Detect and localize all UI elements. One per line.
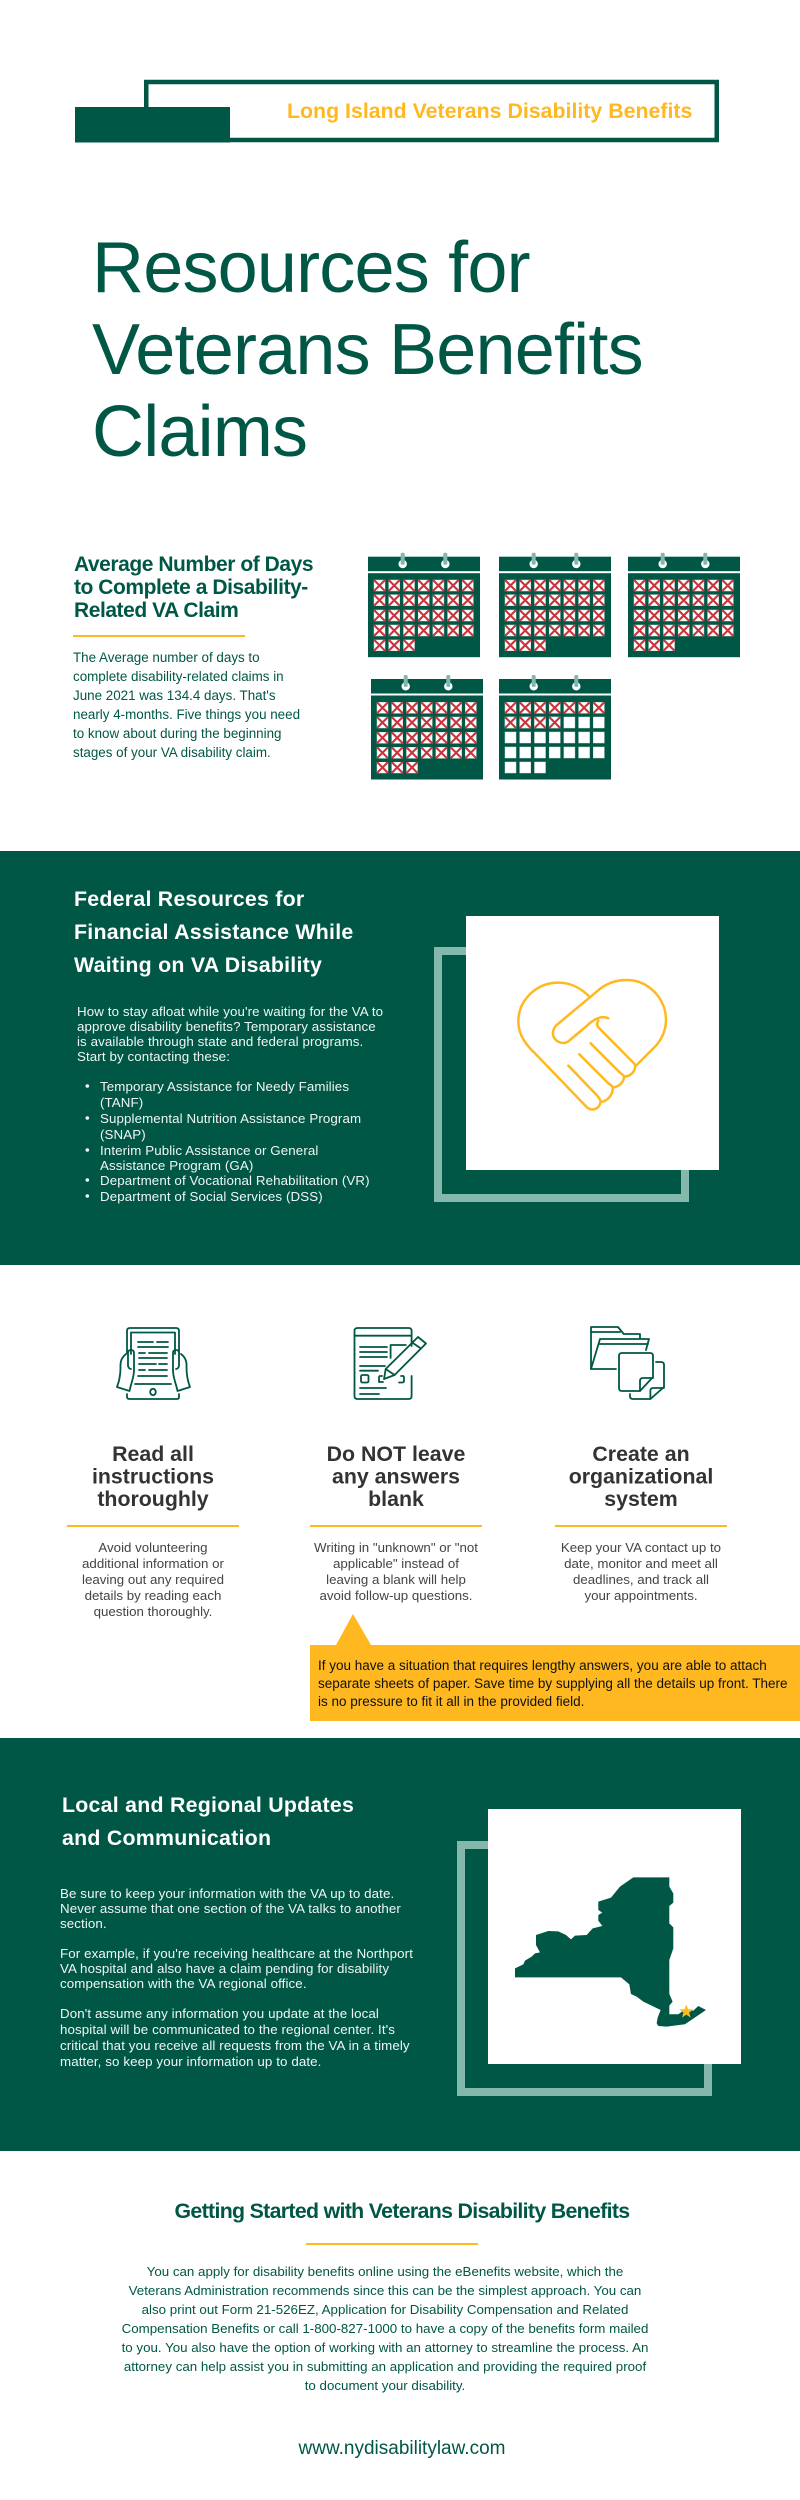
calendar 5: partly crossed off (499, 675, 611, 780)
icon: location star (679, 2004, 693, 2018)
heading: average number of days (74, 553, 313, 622)
text block: getting started: to you. You also have the option of working with an attorney to streamline the process. An (122, 2340, 648, 2355)
heading: average number of days: Related VA Claim (74, 599, 238, 622)
panel: federal resources (0, 851, 800, 1265)
heading: local and regional updates (62, 1793, 354, 1850)
heading: read all instructions: thoroughly (97, 1487, 209, 1511)
heading: read all instructions: instructions (92, 1464, 214, 1488)
heading: do not leave: any answers (332, 1464, 460, 1488)
text block: read all: question thoroughly. (94, 1604, 212, 1619)
text block: average days: stages of your VA disability claim. (73, 745, 271, 760)
text block: getting started: Compensation Benefits or call 1-800-827-1000 to have a copy of the benefits form mailed (122, 2321, 648, 2336)
map: New York State (515, 1877, 706, 2027)
divider (306, 2243, 478, 2245)
text block: do not leave: applicable" instead of (333, 1556, 459, 1571)
text block: average days: complete disability-related claims in (73, 669, 284, 684)
heading: create an organizational system (569, 1442, 713, 1511)
text block: intro: is available through state and federal programs. (77, 1034, 363, 1049)
heading: average number of days: to Complete a Disability- (74, 576, 308, 599)
heading: federal resources: Financial Assistance While (74, 920, 354, 944)
text block: updates: critical that you receive all requests from the VA in a timely (60, 2038, 410, 2053)
list: programs: Temporary Assistance for Needy Families (100, 1079, 349, 1094)
divider (555, 1525, 727, 1527)
text block: getting started: to document your disability. (305, 2378, 465, 2393)
heading: create an organizational system: organizational (569, 1464, 713, 1488)
heading: read all instructions: Read all (112, 1442, 194, 1466)
text block: getting started: also print out Form 21-526EZ, Application for Disability Compensation and Related (142, 2302, 628, 2317)
divider (73, 635, 245, 637)
column: read all instructions (67, 1328, 239, 1619)
text block: updates (60, 1886, 413, 2069)
list: programs: Interim Public Assistance or General (100, 1143, 318, 1158)
title (92, 228, 643, 472)
text block: updates: section. (60, 1916, 107, 1931)
icon: handshake heart (518, 980, 666, 1109)
calendar 3 (628, 553, 740, 657)
heading: read all instructions (92, 1442, 214, 1511)
list: programs: Assistance Program (GA) (100, 1158, 253, 1173)
list: programs: Department of Vocational Rehabilitation (VR) (100, 1173, 370, 1188)
text block: average days (73, 650, 300, 760)
list: programs: Department of Social Services (DSS) (100, 1189, 323, 1204)
heading: do not leave (327, 1442, 465, 1511)
icon: folders and pages (591, 1327, 664, 1399)
heading: federal resources (74, 887, 354, 977)
list: programs: (SNAP) (100, 1127, 146, 1142)
heading: federal resources: Waiting on VA Disability (74, 953, 322, 977)
panel: local and regional updates (0, 1738, 800, 2151)
text block: read all: details by reading each (85, 1588, 221, 1603)
text block: updates: Never assume that one section of the VA talks to another (60, 1901, 401, 1916)
list: programs: (TANF) (100, 1095, 143, 1110)
text block: updates: matter, so keep your information up to date. (60, 2054, 321, 2069)
text block: updates: compensation with the VA regional office. (60, 1976, 307, 1991)
text block: average days: The Average number of days to (73, 650, 260, 665)
column: do not leave answers blank (310, 1328, 482, 1603)
divider (310, 1525, 482, 1527)
text block: create a system: Keep your VA contact up to (561, 1540, 721, 1555)
callout: lengthy answers (310, 1614, 800, 1721)
calendars: five months of crossed-off days (368, 553, 740, 780)
text block: getting started (122, 2264, 648, 2393)
title: Veterans Benefits (92, 310, 643, 390)
text block: do not leave: avoid follow-up questions. (319, 1588, 473, 1603)
text block: do not leave (314, 1540, 478, 1603)
text block: do not leave: Writing in "unknown" or "not (314, 1540, 478, 1555)
icon: tablet in hands (117, 1328, 190, 1399)
callout text: separate sheets of paper. Save time by supplying all the details up front. There (318, 1676, 788, 1691)
divider (67, 1525, 239, 1527)
callout text: is no pressure to fit it all in the provided field. (318, 1694, 584, 1709)
white image box (466, 916, 719, 1170)
text block: updates: VA hospital and also have a claim pending for disability (60, 1961, 389, 1976)
text block: create a system (561, 1540, 721, 1603)
text block: create a system: your appointments. (584, 1588, 698, 1603)
heading: getting started: Getting Started with Veterans Disability Benefits (175, 2199, 629, 2223)
list: programs: Supplemental Nutrition Assistance Program (100, 1111, 361, 1126)
header banner: outlined box with dark tab (75, 82, 717, 142)
image frame outline (461, 1845, 708, 2092)
banner text: Long Island Veterans Disability Benefits (287, 99, 692, 123)
callout text: If you have a situation that requires lengthy answers, you are able to attach (318, 1658, 767, 1673)
text block: intro: approve disability benefits? Temporary assistance (77, 1019, 376, 1034)
text block: updates: hospital will be communicated to the regional center. It's (60, 2022, 395, 2037)
text block: do not leave: leaving a blank will help (326, 1572, 466, 1587)
calendar 4 (371, 675, 483, 780)
text block: average days: to know about during the beginning (73, 726, 281, 741)
text block: intro: Start by contacting these: (77, 1049, 230, 1064)
text block: average days: June 2021 was 134.4 days. That's (73, 688, 276, 703)
heading: local and regional updates: and Communication (62, 1826, 271, 1850)
text block: read all: leaving out any required (82, 1572, 224, 1587)
text block: updates: Be sure to keep your information with the VA up to date. (60, 1886, 394, 1901)
list: programs (86, 1079, 370, 1204)
text block: average days: nearly 4-months. Five things you need (73, 707, 300, 722)
text block: getting started: attorney can help assist you in submitting an application and providing the required proof (124, 2359, 646, 2374)
text block: intro (77, 1004, 383, 1064)
heading: do not leave: blank (368, 1487, 424, 1511)
title: Resources for (92, 228, 530, 308)
heading: local and regional updates: Local and Regional Updates (62, 1793, 354, 1817)
image frame outline (438, 951, 685, 1198)
text block: updates: Don't assume any information you update at the local (60, 2006, 379, 2021)
text block: getting started: You can apply for disability benefits online using the eBenefits website, which the (147, 2264, 623, 2279)
text block: create a system: deadlines, and track all (573, 1572, 709, 1587)
website url: www.nydisabilitylaw.com (298, 2438, 505, 2459)
text block: read all: additional information or (82, 1556, 225, 1571)
text block: read all: Avoid volunteering (98, 1540, 208, 1555)
callout text (318, 1658, 788, 1709)
icon: form and pencil (354, 1328, 426, 1399)
heading: create an organizational system: system (604, 1487, 678, 1511)
white image box (488, 1809, 741, 2064)
heading: federal resources: Federal Resources for (74, 887, 304, 911)
calendar 2 (499, 553, 611, 657)
text block: updates: For example, if you're receiving healthcare at the Northport (60, 1946, 413, 1961)
heading: do not leave: Do NOT leave (327, 1442, 465, 1466)
column: create an organizational system (555, 1327, 727, 1603)
text block: intro: How to stay afloat while you're waiting for the VA to (77, 1004, 383, 1019)
heading: average number of days: Average Number of Days (74, 553, 313, 576)
text block: read all (82, 1540, 225, 1619)
text block: create a system: date, monitor and meet all (564, 1556, 718, 1571)
heading: create an organizational system: Create an (592, 1442, 690, 1466)
text block: getting started: Veterans Administration recommends since this can be the simplest approach. You can (129, 2283, 641, 2298)
calendar 1 (368, 553, 480, 657)
title: Claims (92, 392, 307, 472)
